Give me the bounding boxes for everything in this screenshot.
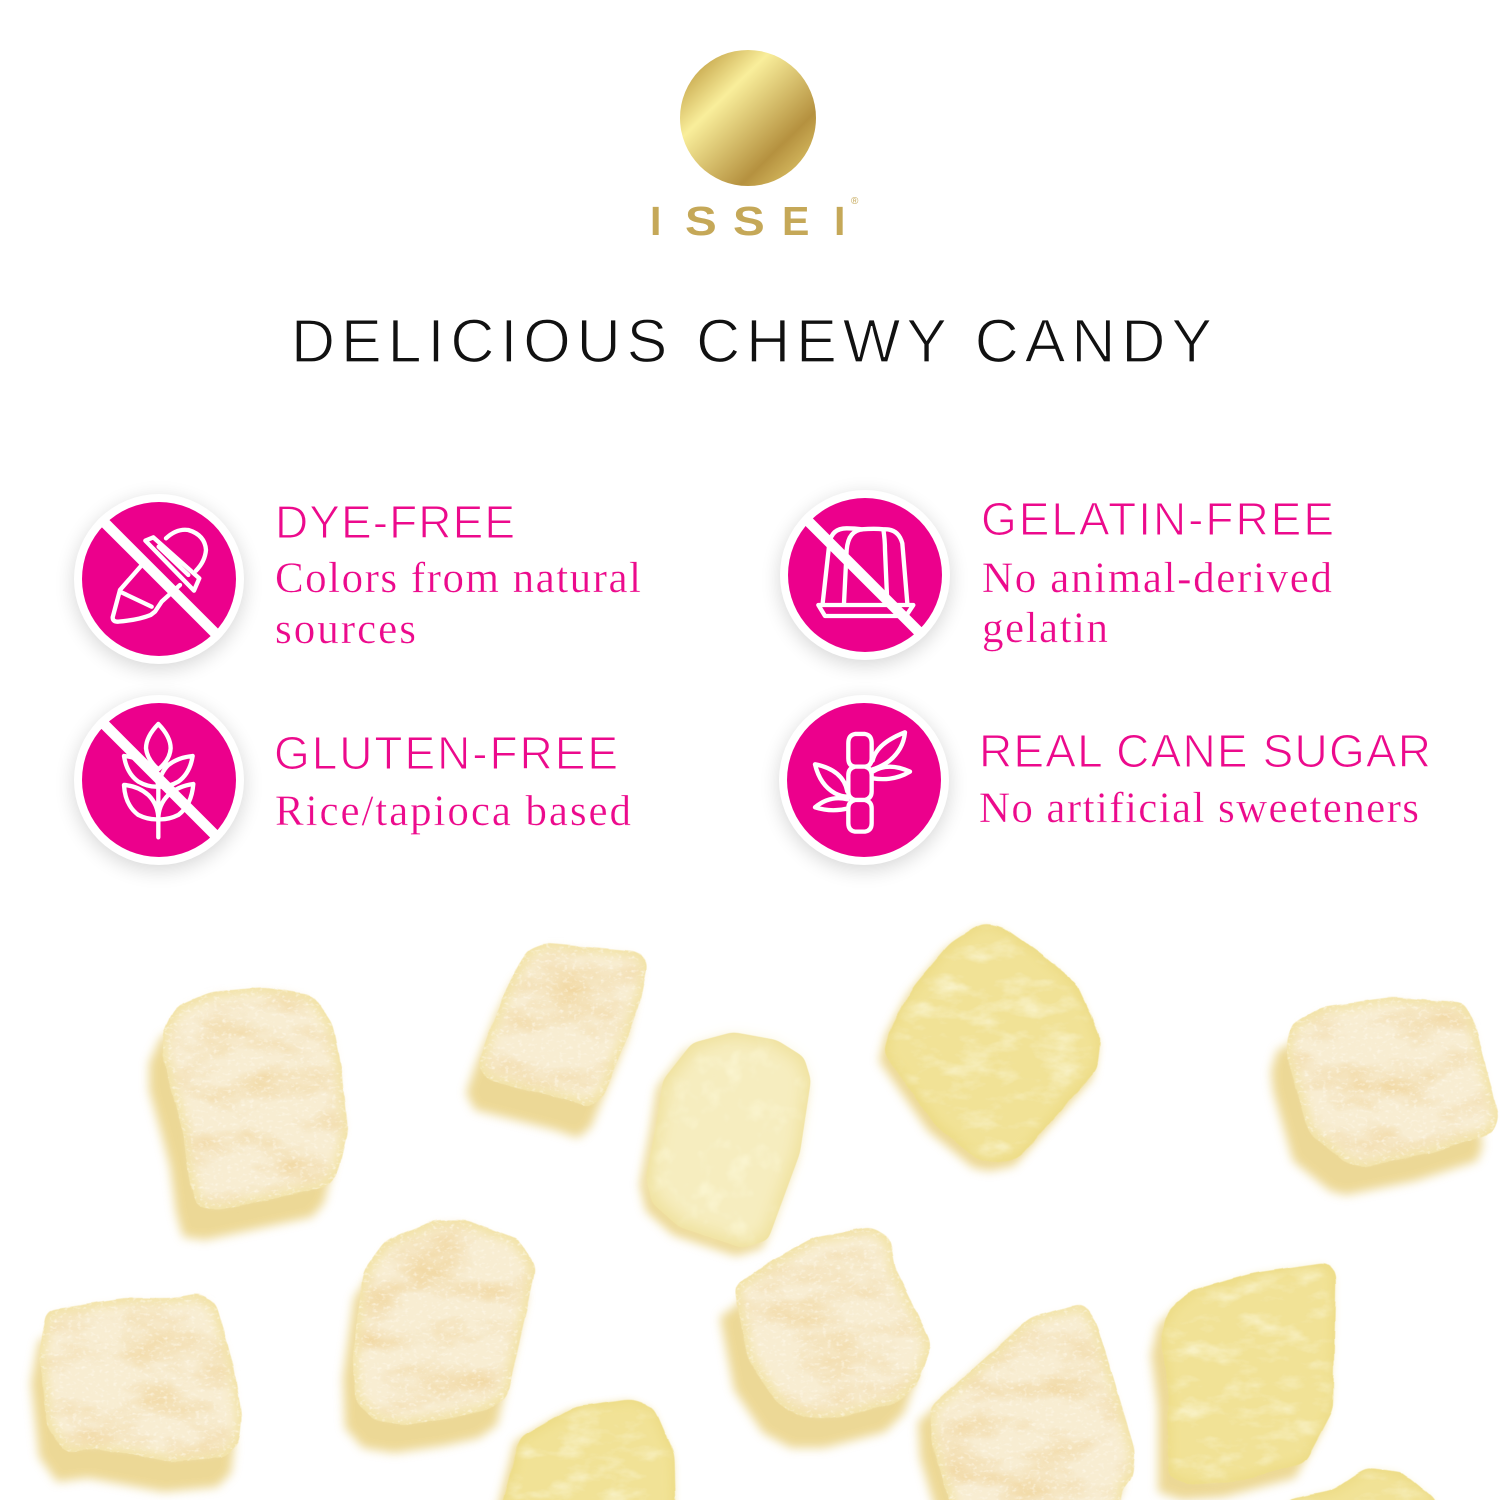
heading: DYE-FREE [275, 496, 515, 548]
description: Colors from natural [275, 555, 641, 602]
description [275, 555, 641, 653]
heading: GLUTEN-FREE [274, 727, 618, 779]
heading: GELATIN-FREE [981, 493, 1334, 545]
wordmark: I [650, 198, 661, 244]
candy 11 [493, 1399, 676, 1500]
candy 6 [39, 1293, 242, 1462]
description: No artificial sweeteners [979, 785, 1419, 832]
wordmark: I [834, 198, 845, 244]
wordmark: S [685, 199, 717, 244]
candy 5 [1287, 997, 1499, 1167]
candy 4 [884, 923, 1101, 1163]
registered mark: ® [851, 196, 859, 207]
candy 10 [1161, 1262, 1336, 1485]
description: gelatin [982, 605, 1108, 652]
heading: REAL CANE SUGAR [979, 725, 1431, 777]
candy photo [31, 923, 1499, 1500]
icon: wheat crossed out [74, 695, 244, 870]
wordmark [650, 198, 845, 244]
candy shadows [31, 931, 1483, 1500]
feature: real cane sugar [779, 695, 1431, 870]
candy 8 [734, 1227, 932, 1418]
candy 7 [353, 1220, 536, 1425]
gold circle [680, 50, 816, 186]
feature: gelatin-free [780, 490, 1334, 665]
description: Rice/tapioca based [275, 788, 631, 835]
description: No animal-derived [982, 555, 1332, 602]
icon: gelatin mold crossed out [780, 490, 950, 665]
wordmark: S [733, 199, 765, 244]
icon: dye dropper crossed out [74, 494, 244, 669]
logo: ISSEI gold circle and wordmark [650, 50, 859, 244]
feature: gluten-free [74, 695, 631, 870]
candy 1 [163, 987, 348, 1210]
title: DELICIOUS CHEWY CANDY [291, 307, 1212, 375]
candy 12 [1286, 1468, 1437, 1500]
feature: dye-free [74, 494, 641, 669]
wordmark: E [782, 198, 809, 244]
candy 3 [646, 1032, 811, 1248]
candy 9 [930, 1303, 1135, 1500]
description: sources [275, 606, 416, 653]
icon: sugar cane [779, 695, 949, 870]
candy 2 [478, 943, 648, 1108]
description [982, 555, 1332, 652]
